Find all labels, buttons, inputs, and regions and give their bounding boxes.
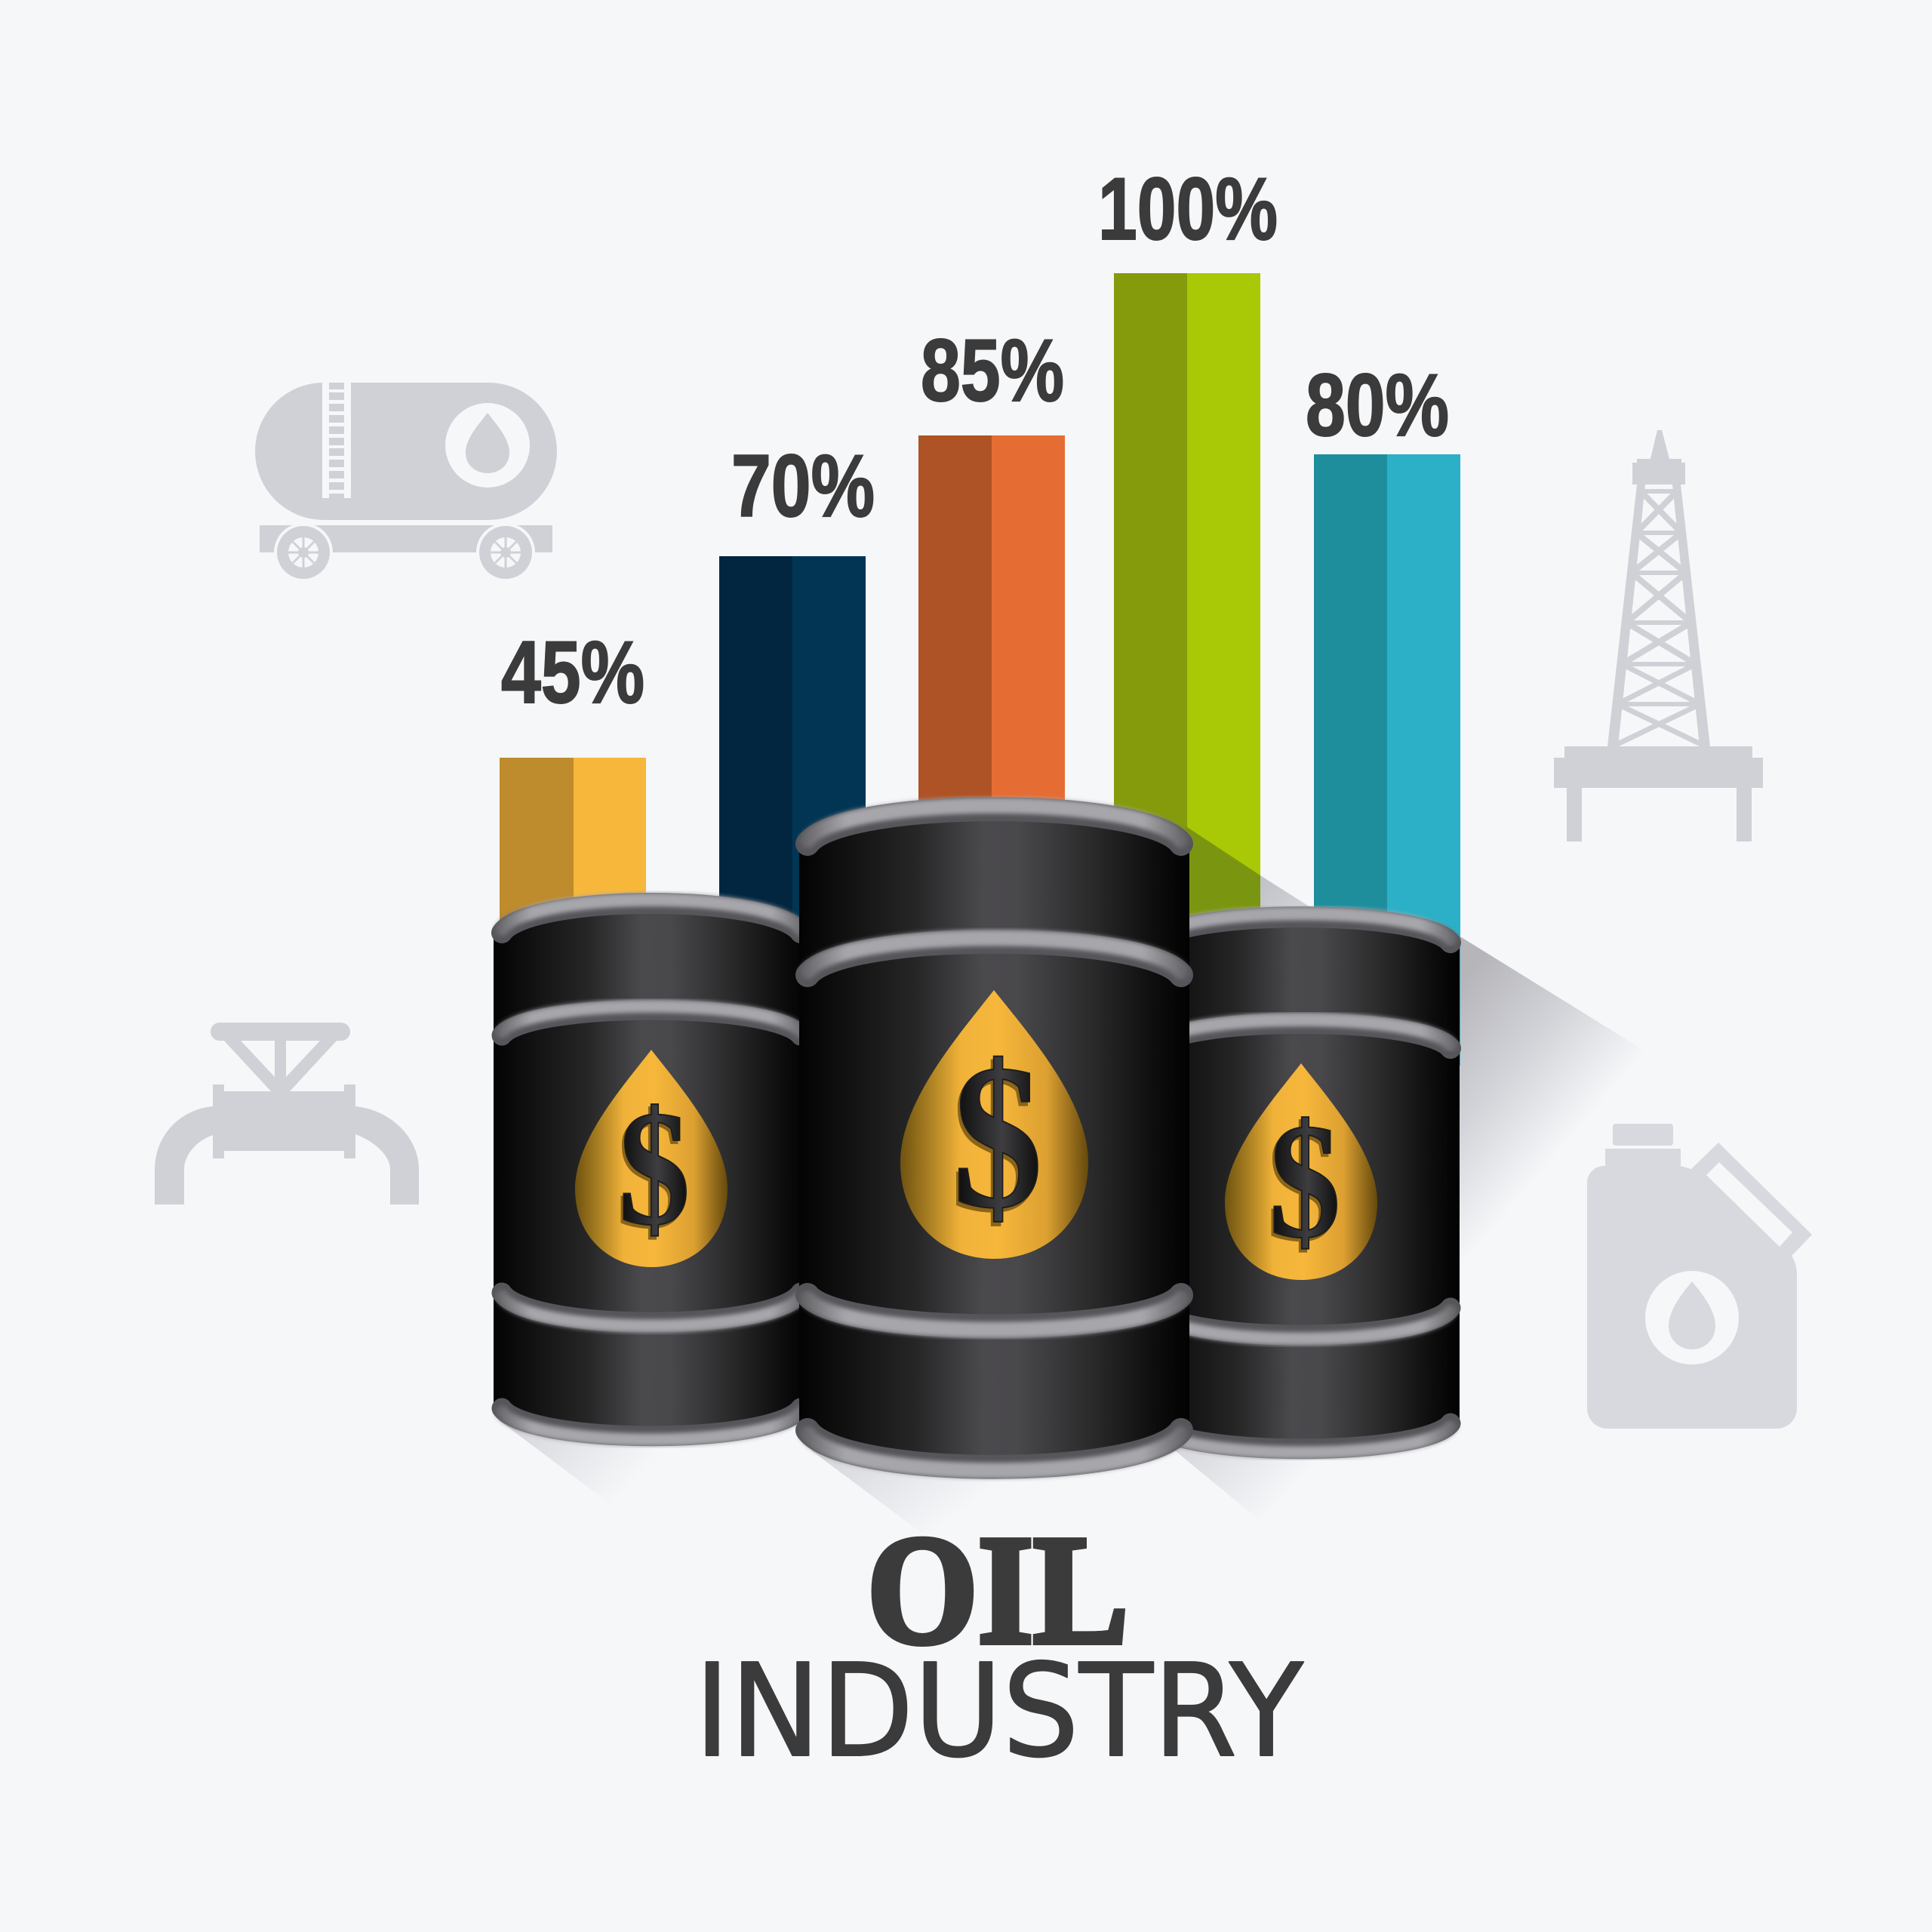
floor shadow: right barrel xyxy=(1171,1447,1313,1522)
icon: pipeline valve xyxy=(155,1023,419,1204)
rim bands xyxy=(1152,913,1451,1453)
dollar sign shadow: $ xyxy=(1267,1094,1338,1275)
bar: 85% orange xyxy=(918,435,1065,828)
barrel long shadow xyxy=(1457,934,1647,1279)
icon: oil jug xyxy=(1587,1124,1812,1429)
dollar sign: $ xyxy=(952,1022,1043,1251)
dollar sign: $ xyxy=(619,1078,690,1260)
barrel: center xyxy=(799,805,1189,1471)
bar: 100% green xyxy=(1114,273,1260,981)
dollar sign: $ xyxy=(1269,1091,1340,1272)
barrel: right xyxy=(1143,913,1460,1453)
dollar sign shadow: $ xyxy=(950,1026,1041,1255)
barrel: left xyxy=(494,900,809,1440)
oil drop xyxy=(575,1050,728,1267)
bar: 45% amber xyxy=(500,758,646,954)
title: INDUSTRY: INDUSTRY xyxy=(694,1637,1304,1786)
bar: 80% teal xyxy=(1314,454,1460,1066)
bar chart xyxy=(500,159,1460,1066)
oil drop xyxy=(900,990,1088,1259)
floor shadow: center barrel xyxy=(811,1451,1002,1537)
shadow across gap between bars xyxy=(1260,875,1314,951)
label: 85%: 85% xyxy=(921,321,1064,420)
oil drop xyxy=(1225,1063,1377,1280)
rim bands xyxy=(808,805,1181,1471)
title: OIL: OIL xyxy=(867,1503,1128,1676)
rim bands xyxy=(502,900,801,1440)
label: 100%: 100% xyxy=(1098,159,1278,258)
title xyxy=(694,1503,1304,1786)
label: 45%: 45% xyxy=(501,623,645,721)
label: 70%: 70% xyxy=(731,436,875,535)
icon: oil derrick xyxy=(1554,430,1763,841)
label: 80%: 80% xyxy=(1306,355,1449,454)
icon: tanker wagon xyxy=(255,383,557,583)
bar: 70% navy xyxy=(719,556,866,949)
floor shadow: left barrel xyxy=(499,1420,664,1506)
dollar sign shadow: $ xyxy=(617,1081,688,1263)
